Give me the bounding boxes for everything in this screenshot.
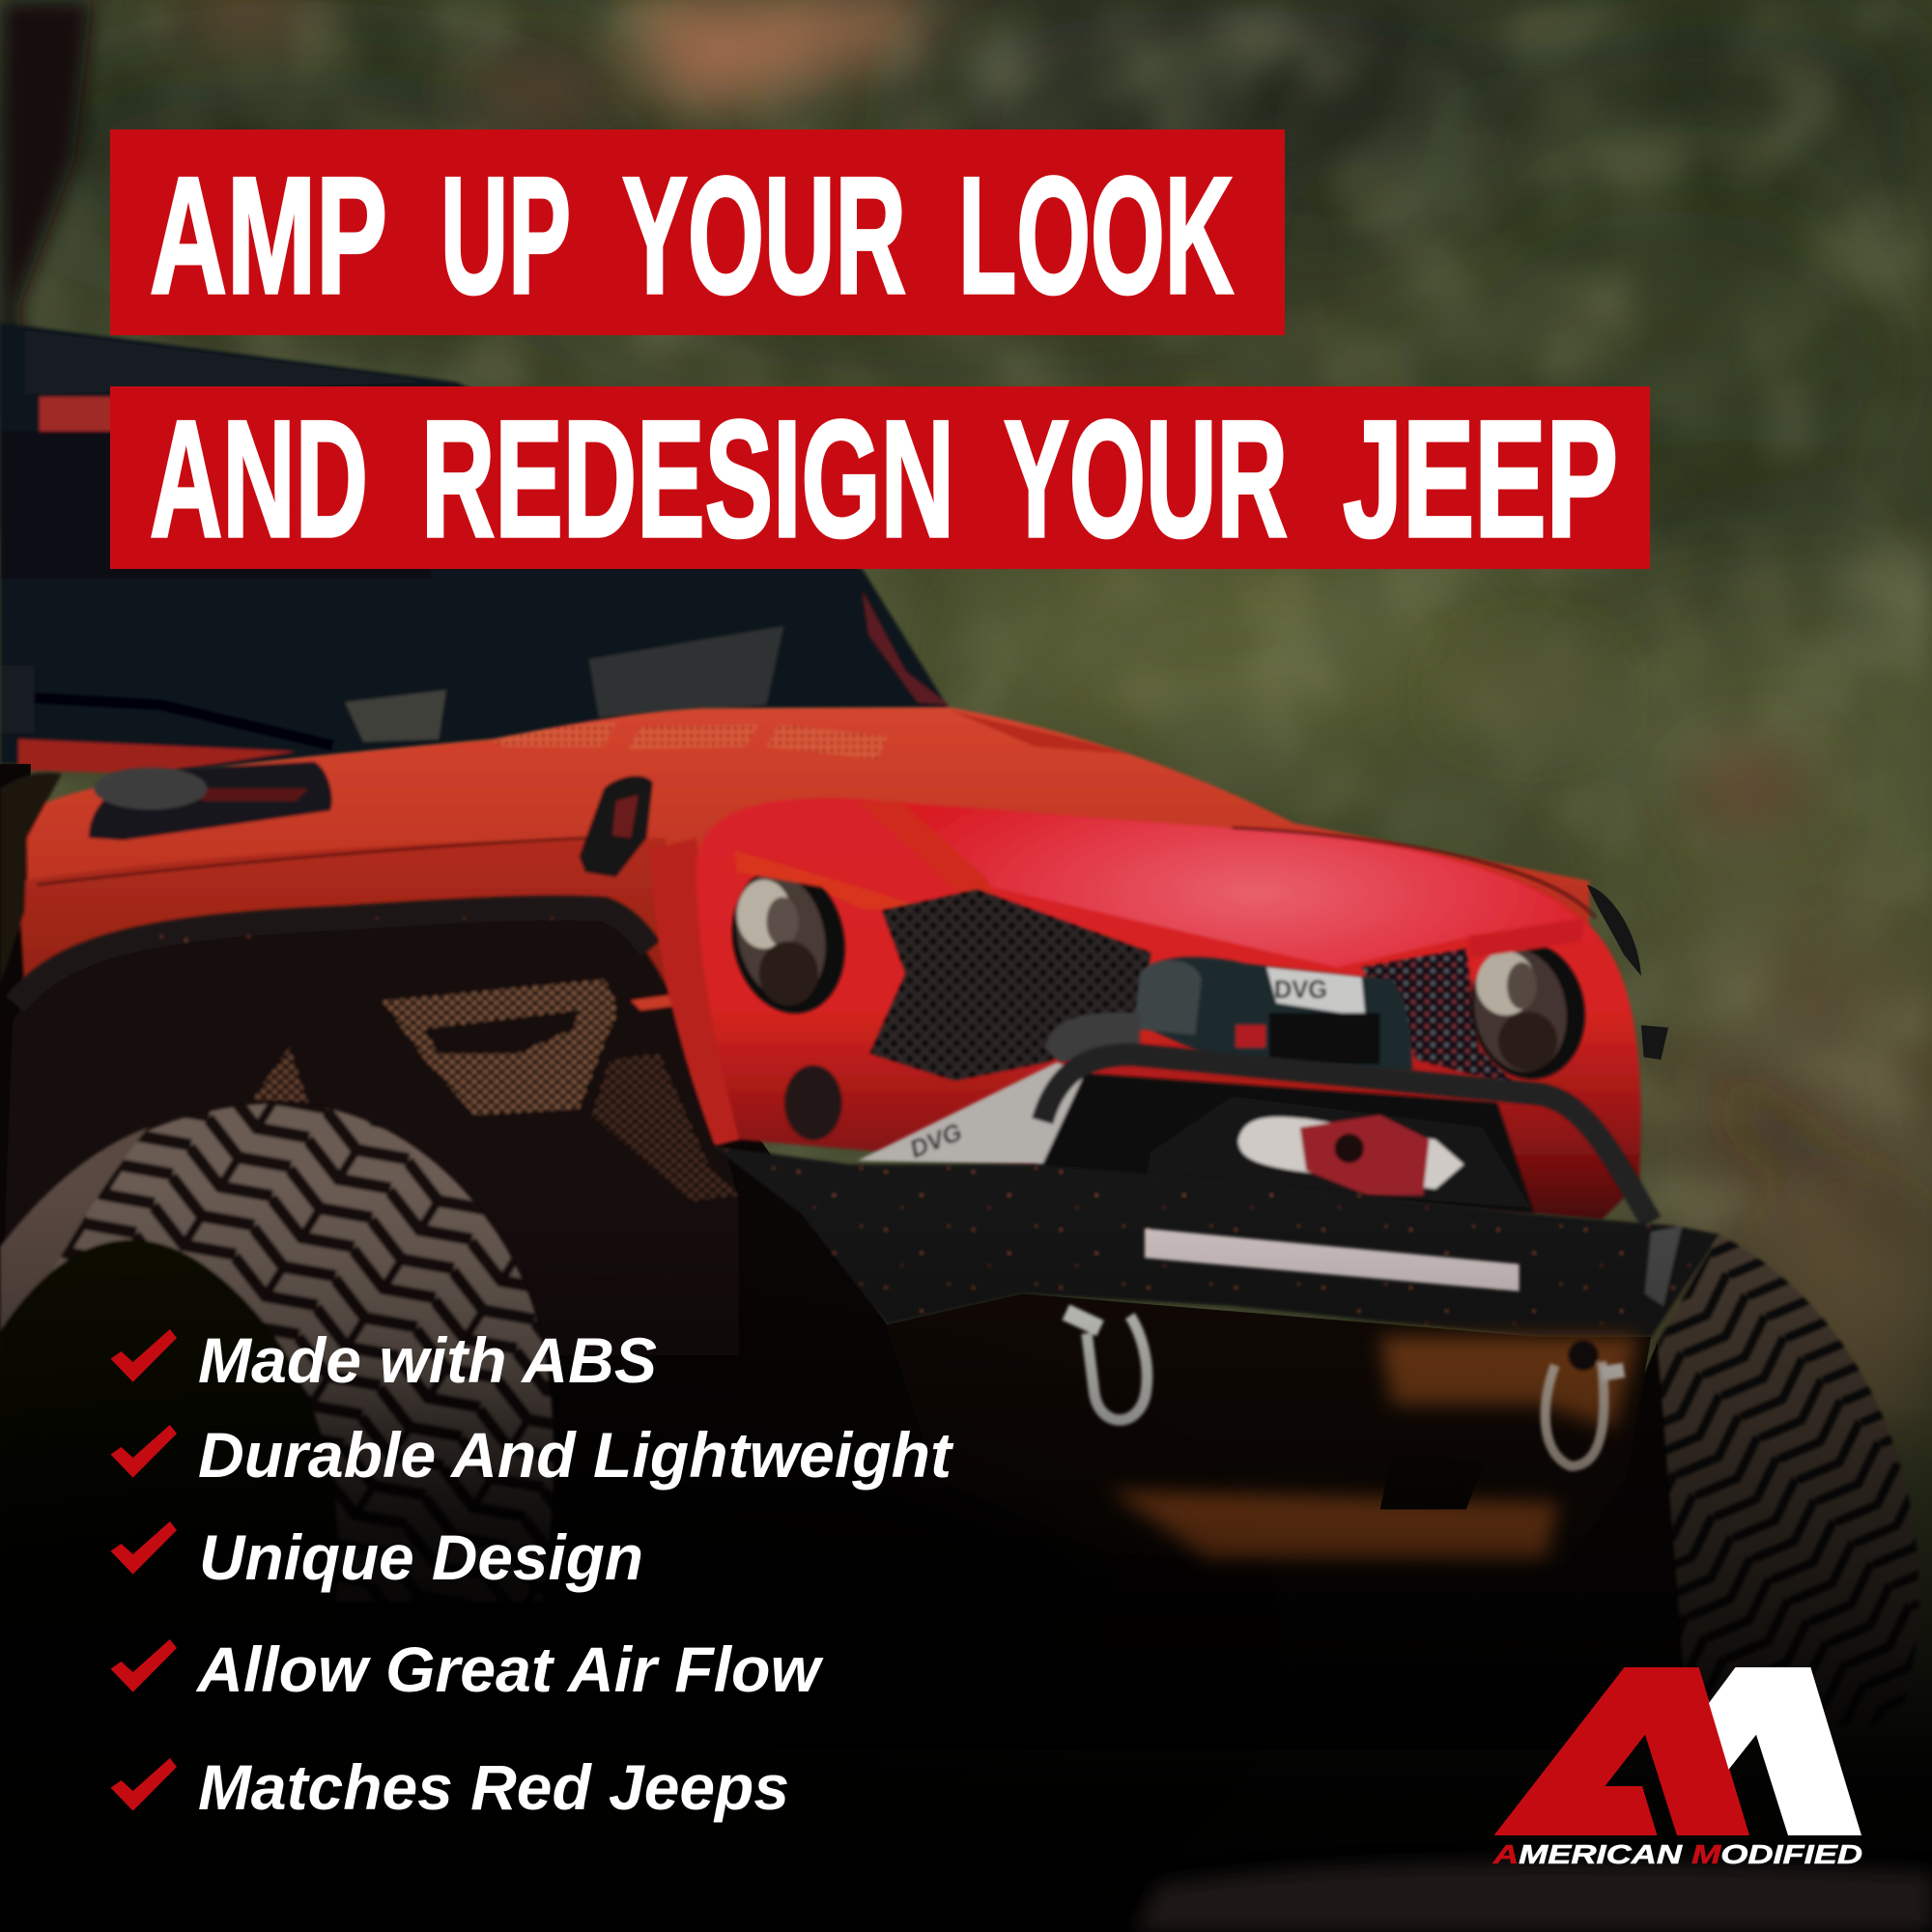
jeep roof and windshield <box>0 323 949 774</box>
heading banner: line 1: UP <box>440 143 571 328</box>
heading banner: line 1 <box>110 129 1285 335</box>
side marker and mirror <box>1587 885 1668 1060</box>
right tow shackle <box>1546 1341 1624 1466</box>
heading banner: line 1: YOUR <box>622 143 906 328</box>
left tow shackle <box>1065 1312 1147 1420</box>
heading banner: line 2: YOUR <box>1004 386 1288 572</box>
grille mesh openings <box>784 890 1518 1140</box>
feature list <box>110 1324 954 1823</box>
heading banner: line 2: AND <box>150 386 368 572</box>
jeep hood and body side <box>0 707 1589 1140</box>
winch <box>1045 957 1412 1072</box>
logo wordmark: AMERICAN MODIFIED <box>1492 1839 1862 1869</box>
wheel well and fender flare <box>0 908 739 1355</box>
winch: DVG <box>1274 977 1327 1004</box>
feature: allow great air flow: Allow Great Air Flow <box>195 1634 824 1705</box>
ground <box>1133 1862 1932 1932</box>
logo: American Modified <box>1492 1667 1862 1869</box>
dark chassis and undercarriage <box>0 764 1749 1749</box>
left side shade <box>0 1430 1133 1848</box>
feature: made with ABS: Made with ABS <box>198 1324 657 1396</box>
front right tyre <box>1658 1235 1919 1725</box>
heading banner: line 2 <box>110 386 1650 572</box>
feature: durable and lightweight: Durable And Lightweight <box>198 1419 954 1491</box>
front left tyre <box>0 1103 554 1627</box>
left headlight <box>719 850 863 1024</box>
left foreground tree shadow <box>0 0 93 529</box>
logo mark <box>1493 1667 1861 1835</box>
front grille panel <box>650 798 1641 1220</box>
bull bar and white plate <box>858 1055 1651 1222</box>
bull bar and white plate: DVG <box>906 1119 966 1164</box>
LED light bar <box>1145 1229 1520 1292</box>
right headlight <box>1460 918 1596 1088</box>
front bumper <box>712 1146 1720 1337</box>
heading banner: line 1: AMP <box>150 143 387 328</box>
feature: matches red jeeps: Matches Red Jeeps <box>198 1751 789 1823</box>
lower front, muddy skid plate <box>887 1293 1651 1565</box>
heading banner: line 1: LOOK <box>958 143 1234 328</box>
heading banner: line 2: JEEP <box>1343 386 1618 572</box>
feature: unique design: Unique Design <box>199 1521 643 1593</box>
dark gradient overlay <box>0 1182 1932 1932</box>
heading banner: line 2: REDESIGN <box>421 386 954 572</box>
